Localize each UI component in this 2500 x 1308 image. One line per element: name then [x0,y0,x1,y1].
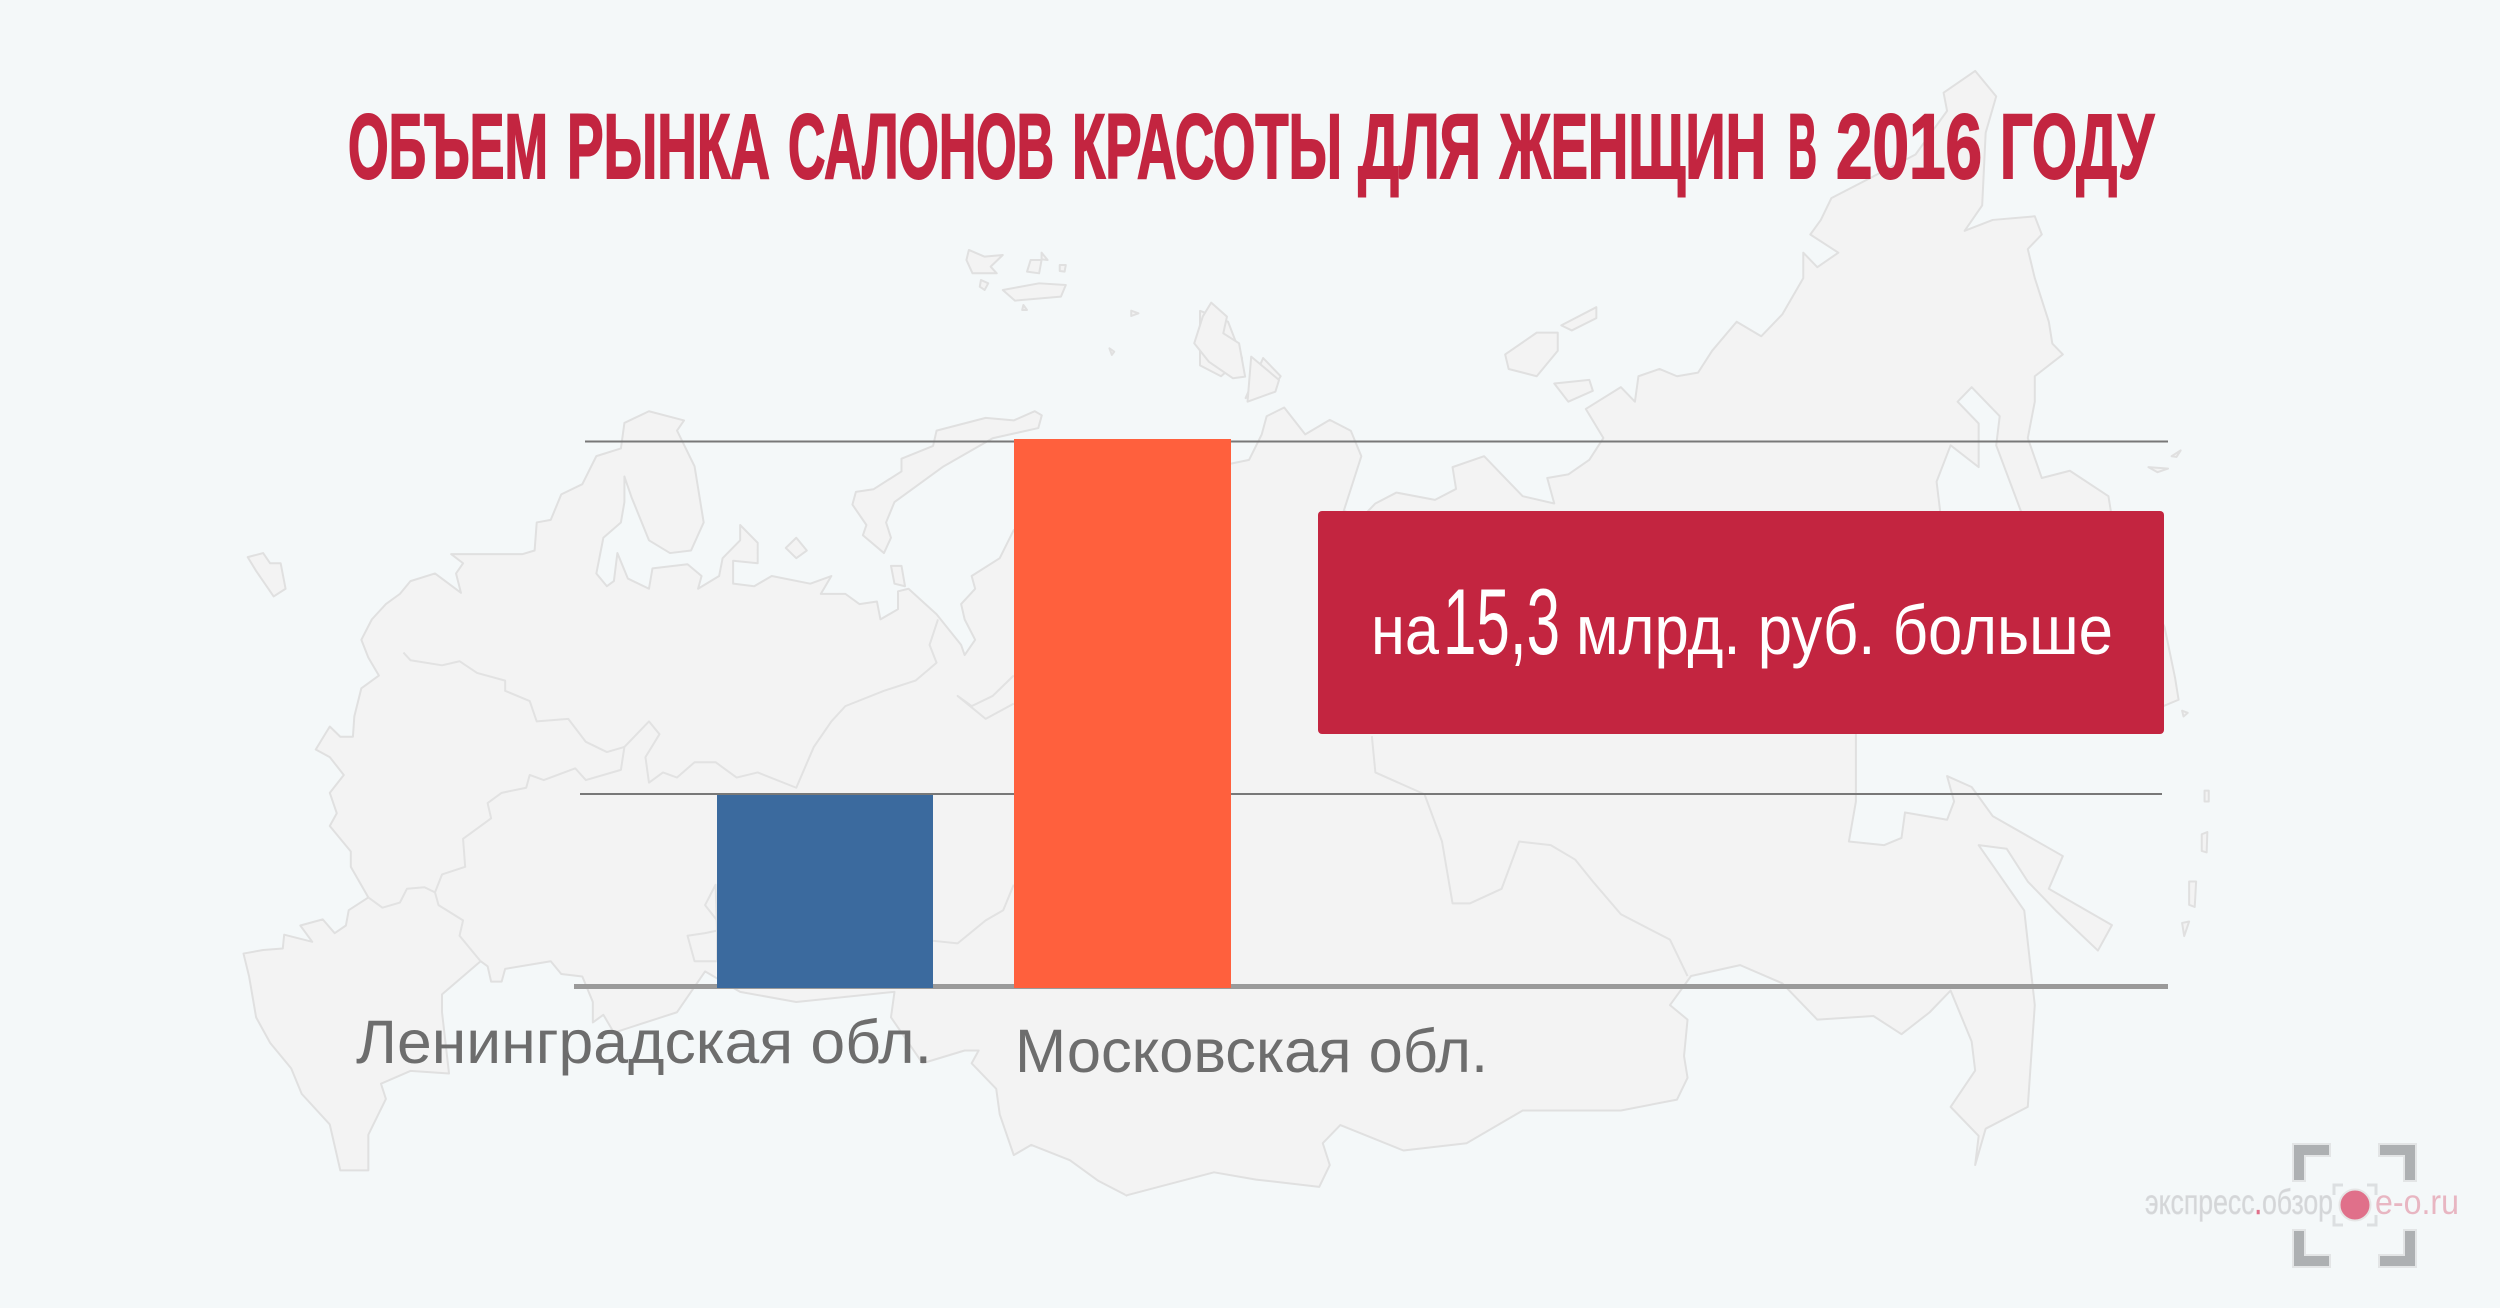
grid lines [580,440,2168,795]
label: Московская обл.: Московская обл. [1015,1017,1488,1085]
title: 2016 [1836,96,1982,198]
background map of Russia [243,71,2209,1196]
title: ДЛЯ [1358,96,1481,198]
title: РЫНКА [567,96,770,198]
label: Ленинградская обл.: Ленинградская обл. [356,1008,932,1076]
title: САЛОНОВ [788,96,1054,198]
bar: Ленинградская обл. [717,795,933,988]
callout: difference: 15,3 [1443,569,1560,674]
title: ГОДУ [2000,96,2155,198]
axis line [574,984,2168,989]
bar: Московская обл. [1014,439,1231,988]
logo: express review [2145,1144,2459,1267]
title: ЖЕНЩИН [1499,96,1766,198]
logo: express review: e-o.ru [2375,1183,2459,1222]
title: КРАСОТЫ [1072,96,1342,198]
callout: difference: на [1371,591,1439,669]
callout: difference: млрд. руб. больше [1576,591,2113,669]
logo: express review: экспресс.обзор [2145,1183,2333,1222]
title: ОБЪЕМ [348,96,548,198]
title: В [1788,96,1817,198]
callout: difference [1318,511,2164,734]
title [348,96,2155,198]
